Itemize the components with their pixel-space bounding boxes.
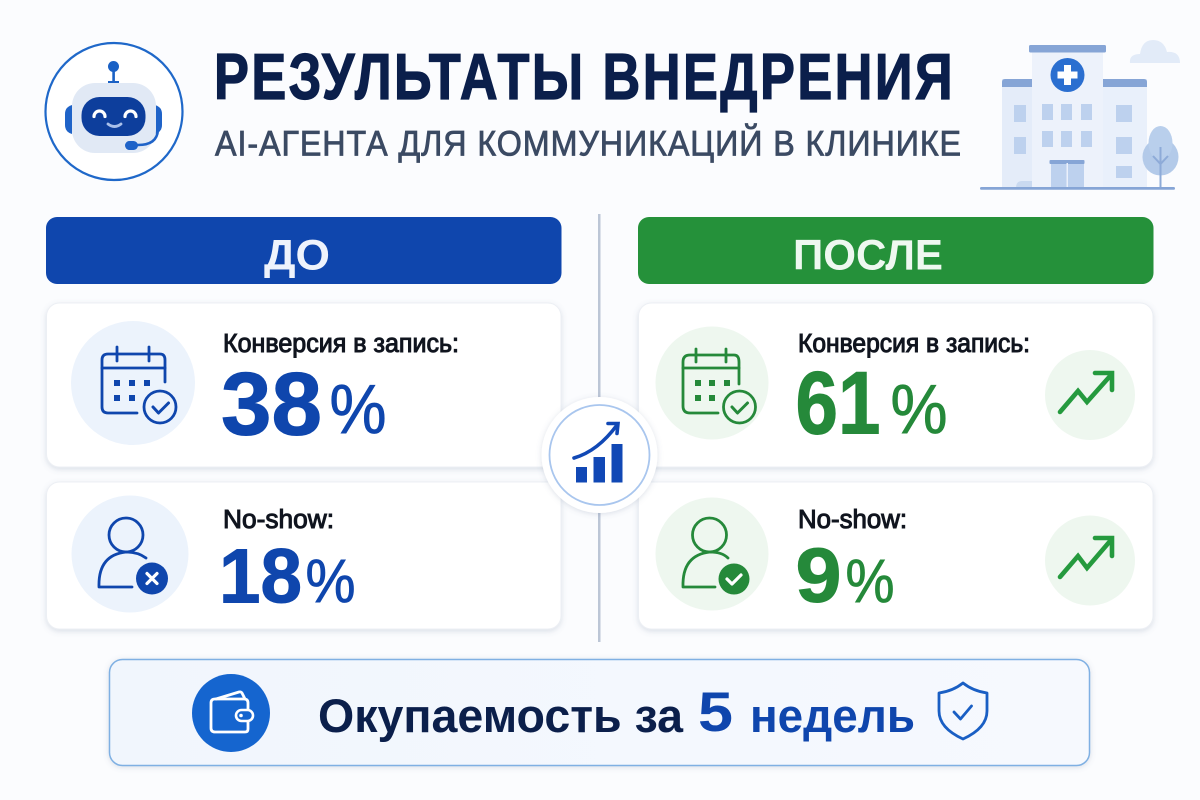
value: 18%: 18 bbox=[219, 534, 302, 620]
icon: growth arrow bbox=[1045, 350, 1135, 440]
callout: payback banner bbox=[110, 660, 1090, 766]
panel: after header bbox=[638, 217, 1154, 284]
label: no-show: No-show: bbox=[223, 506, 334, 534]
panel: before conversion card bbox=[46, 303, 561, 467]
text: 5: 5 bbox=[698, 680, 733, 743]
label: conversion: Конверсия в запись: bbox=[798, 330, 1030, 358]
value: 18%: % bbox=[306, 547, 356, 615]
value: 9%: 9 bbox=[796, 533, 842, 619]
icon: calendar with check bbox=[71, 321, 195, 445]
text: payback: Окупаемость за bbox=[318, 689, 684, 742]
label: no-show: No-show: bbox=[798, 506, 907, 534]
icon: green calendar with check bbox=[656, 326, 768, 440]
value: 38%: % bbox=[330, 370, 386, 448]
label: conversion: Конверсия в запись: bbox=[223, 330, 459, 358]
vertical divider bbox=[598, 214, 600, 642]
subtitle: AI-АГЕНТА ДЛЯ КОММУНИКАЦИЙ В КЛИНИКЕ bbox=[215, 124, 962, 164]
icon: central growth chart badge bbox=[542, 397, 658, 513]
icon: person with cross bbox=[72, 496, 188, 612]
value: 9%: % bbox=[846, 547, 894, 615]
panel: before no-show card bbox=[46, 482, 561, 629]
icon: growth arrow bbox=[1045, 516, 1135, 606]
value: 38%: 38 bbox=[221, 354, 322, 454]
panel: after no-show card bbox=[638, 482, 1153, 629]
value: 61%: % bbox=[890, 370, 948, 448]
icon: hospital illustration bbox=[980, 40, 1180, 190]
icon: shield check bbox=[939, 683, 987, 739]
value: 61%: 61 bbox=[796, 352, 880, 452]
icon: robot in circle bbox=[46, 43, 182, 180]
panel: before header: ДО bbox=[264, 232, 330, 280]
panel: after header: ПОСЛЕ bbox=[793, 232, 943, 280]
icon: person with check bbox=[656, 498, 768, 610]
title: РЕЗУЛЬТАТЫ ВНЕДРЕНИЯ bbox=[214, 41, 955, 113]
icon: wallet bbox=[192, 674, 270, 752]
text: weeks: недель bbox=[750, 689, 915, 742]
panel: after conversion card bbox=[638, 303, 1153, 467]
panel: before header bbox=[46, 217, 562, 284]
